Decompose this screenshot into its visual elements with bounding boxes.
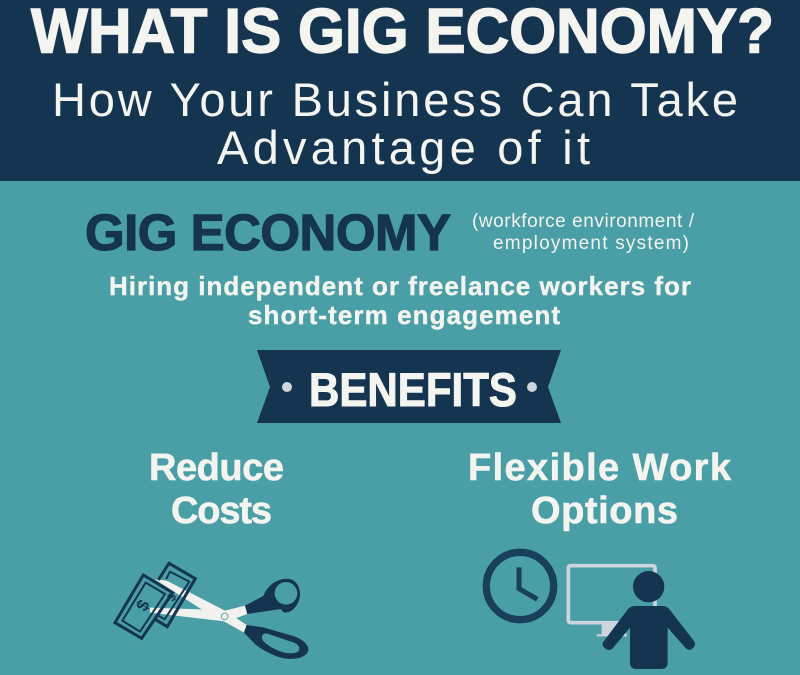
definition text: Hiring independent or freelance workers for [109, 271, 691, 301]
icon: scissors cutting money [115, 563, 308, 659]
definition text: short-term engagement [248, 300, 560, 330]
definition text [109, 271, 691, 330]
benefits banner: BENEFITS [309, 363, 517, 416]
benefit heading: flexible work options: Options [531, 490, 678, 532]
benefits banner [257, 350, 561, 423]
definition note: (workforce environment / [472, 211, 695, 232]
benefit heading: reduce costs [149, 447, 284, 532]
icon: scissors cutting money: $ [164, 591, 180, 604]
definition heading: GIG ECONOMY [85, 204, 451, 261]
icon: clock [486, 552, 554, 620]
subtitle: How Your Business Can Take [52, 73, 738, 126]
definition note: employment system) [493, 233, 689, 254]
benefit heading: flexible work options: Flexible Work [468, 447, 732, 489]
header band [0, 0, 800, 181]
icon: person at monitor [568, 566, 695, 669]
subtitle: Advantage of it [217, 121, 590, 174]
definition note [472, 211, 695, 254]
benefit heading: flexible work options [468, 447, 732, 532]
benefit heading: reduce costs: Costs [171, 490, 272, 532]
icon: scissors cutting money: $ [132, 596, 154, 615]
benefit heading: reduce costs: Reduce [149, 447, 284, 489]
subtitle [52, 73, 738, 174]
